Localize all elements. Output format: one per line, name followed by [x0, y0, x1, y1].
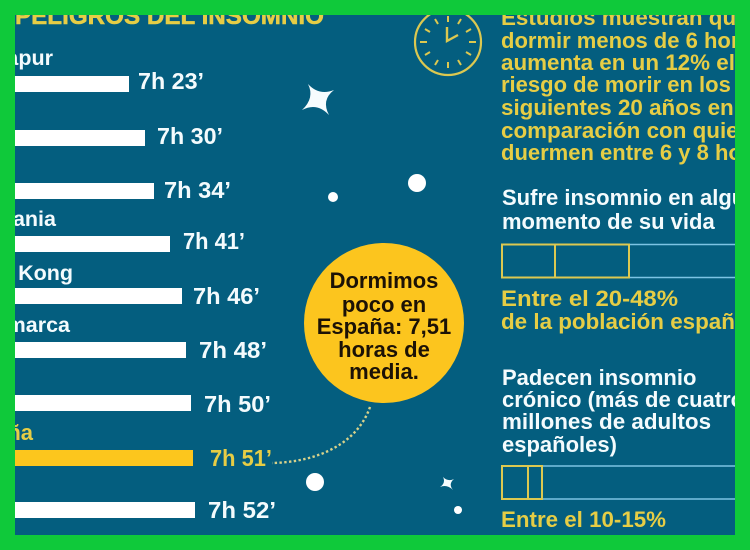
row: 7h 50: 7h 50’ [204, 391, 271, 417]
text block: mortality study: riesgo de morir en los [501, 72, 731, 97]
dotted connector [272, 407, 370, 463]
row: Dinamarca: 7h 48’ [199, 337, 267, 363]
heading: chronic insomnia: españoles) [502, 432, 617, 457]
icon: dot [408, 174, 426, 192]
icon: tiny dot [454, 506, 462, 514]
row: España highlighted [0, 420, 272, 471]
row: España highlighted: 7h 51’ [210, 445, 272, 471]
row: Hong Kong: 7h 46’ [193, 283, 260, 309]
text block: mortality study [501, 5, 750, 165]
progress bar: 10-15% [502, 466, 750, 499]
progress bar: 20-48% [502, 244, 750, 278]
callout: yellow circle: poco en [342, 292, 426, 317]
callout: yellow circle [304, 243, 464, 403]
icon: clock [415, 9, 481, 75]
row: Singapur [0, 46, 204, 94]
text block: 10-15%: Entre el 10-15% [501, 507, 666, 532]
text block: mortality study: Estudios muestran que [501, 5, 749, 30]
heading: insomnia at some point [502, 185, 750, 234]
row: 7h 50 [0, 391, 271, 417]
row: Singapur: 7h 23’ [138, 68, 204, 94]
heading: chronic insomnia: millones de adultos [502, 409, 711, 434]
text block: 20-48%: Entre el 20-48% [501, 286, 678, 311]
row: 7h 34: 7h 34’ [164, 177, 231, 203]
row: Dinamarca [0, 313, 267, 363]
row: Hong Kong [0, 261, 260, 309]
row: 7h 34 [0, 177, 231, 203]
icon: large star [302, 84, 334, 115]
icon: small star [440, 477, 454, 490]
row: Alemania [0, 207, 245, 254]
text block: mortality study: siguientes 20 años en [501, 95, 734, 120]
text block: 20-48% [501, 286, 750, 334]
row: 7h 30 [0, 123, 223, 149]
callout: yellow circle: horas de [338, 337, 430, 362]
heading: chronic insomnia: Padecen insomnio [502, 365, 696, 390]
callout: yellow circle: España: 7,51 [317, 314, 451, 339]
row: Alemania: 7h 41’ [183, 228, 245, 254]
text block: mortality study: aumenta en un 12% el [501, 50, 735, 75]
heading: chronic insomnia [502, 365, 744, 457]
heading: insomnia at some point: momento de su vida [502, 209, 715, 234]
bar chart: hours of sleep by country [0, 46, 276, 523]
icon: small dot [328, 192, 338, 202]
icon: dot lower [306, 473, 324, 491]
row: 7h 30: 7h 30’ [157, 123, 223, 149]
title: PELIGROS DEL INSOMNIO [15, 3, 324, 30]
row: 7h 52 [0, 497, 276, 523]
heading: chronic insomnia: crónico (más de cuatro [502, 387, 744, 412]
callout: yellow circle: media. [349, 359, 419, 384]
row: 7h 52: 7h 52’ [208, 497, 276, 523]
callout: yellow circle: Dormimos [330, 268, 438, 293]
